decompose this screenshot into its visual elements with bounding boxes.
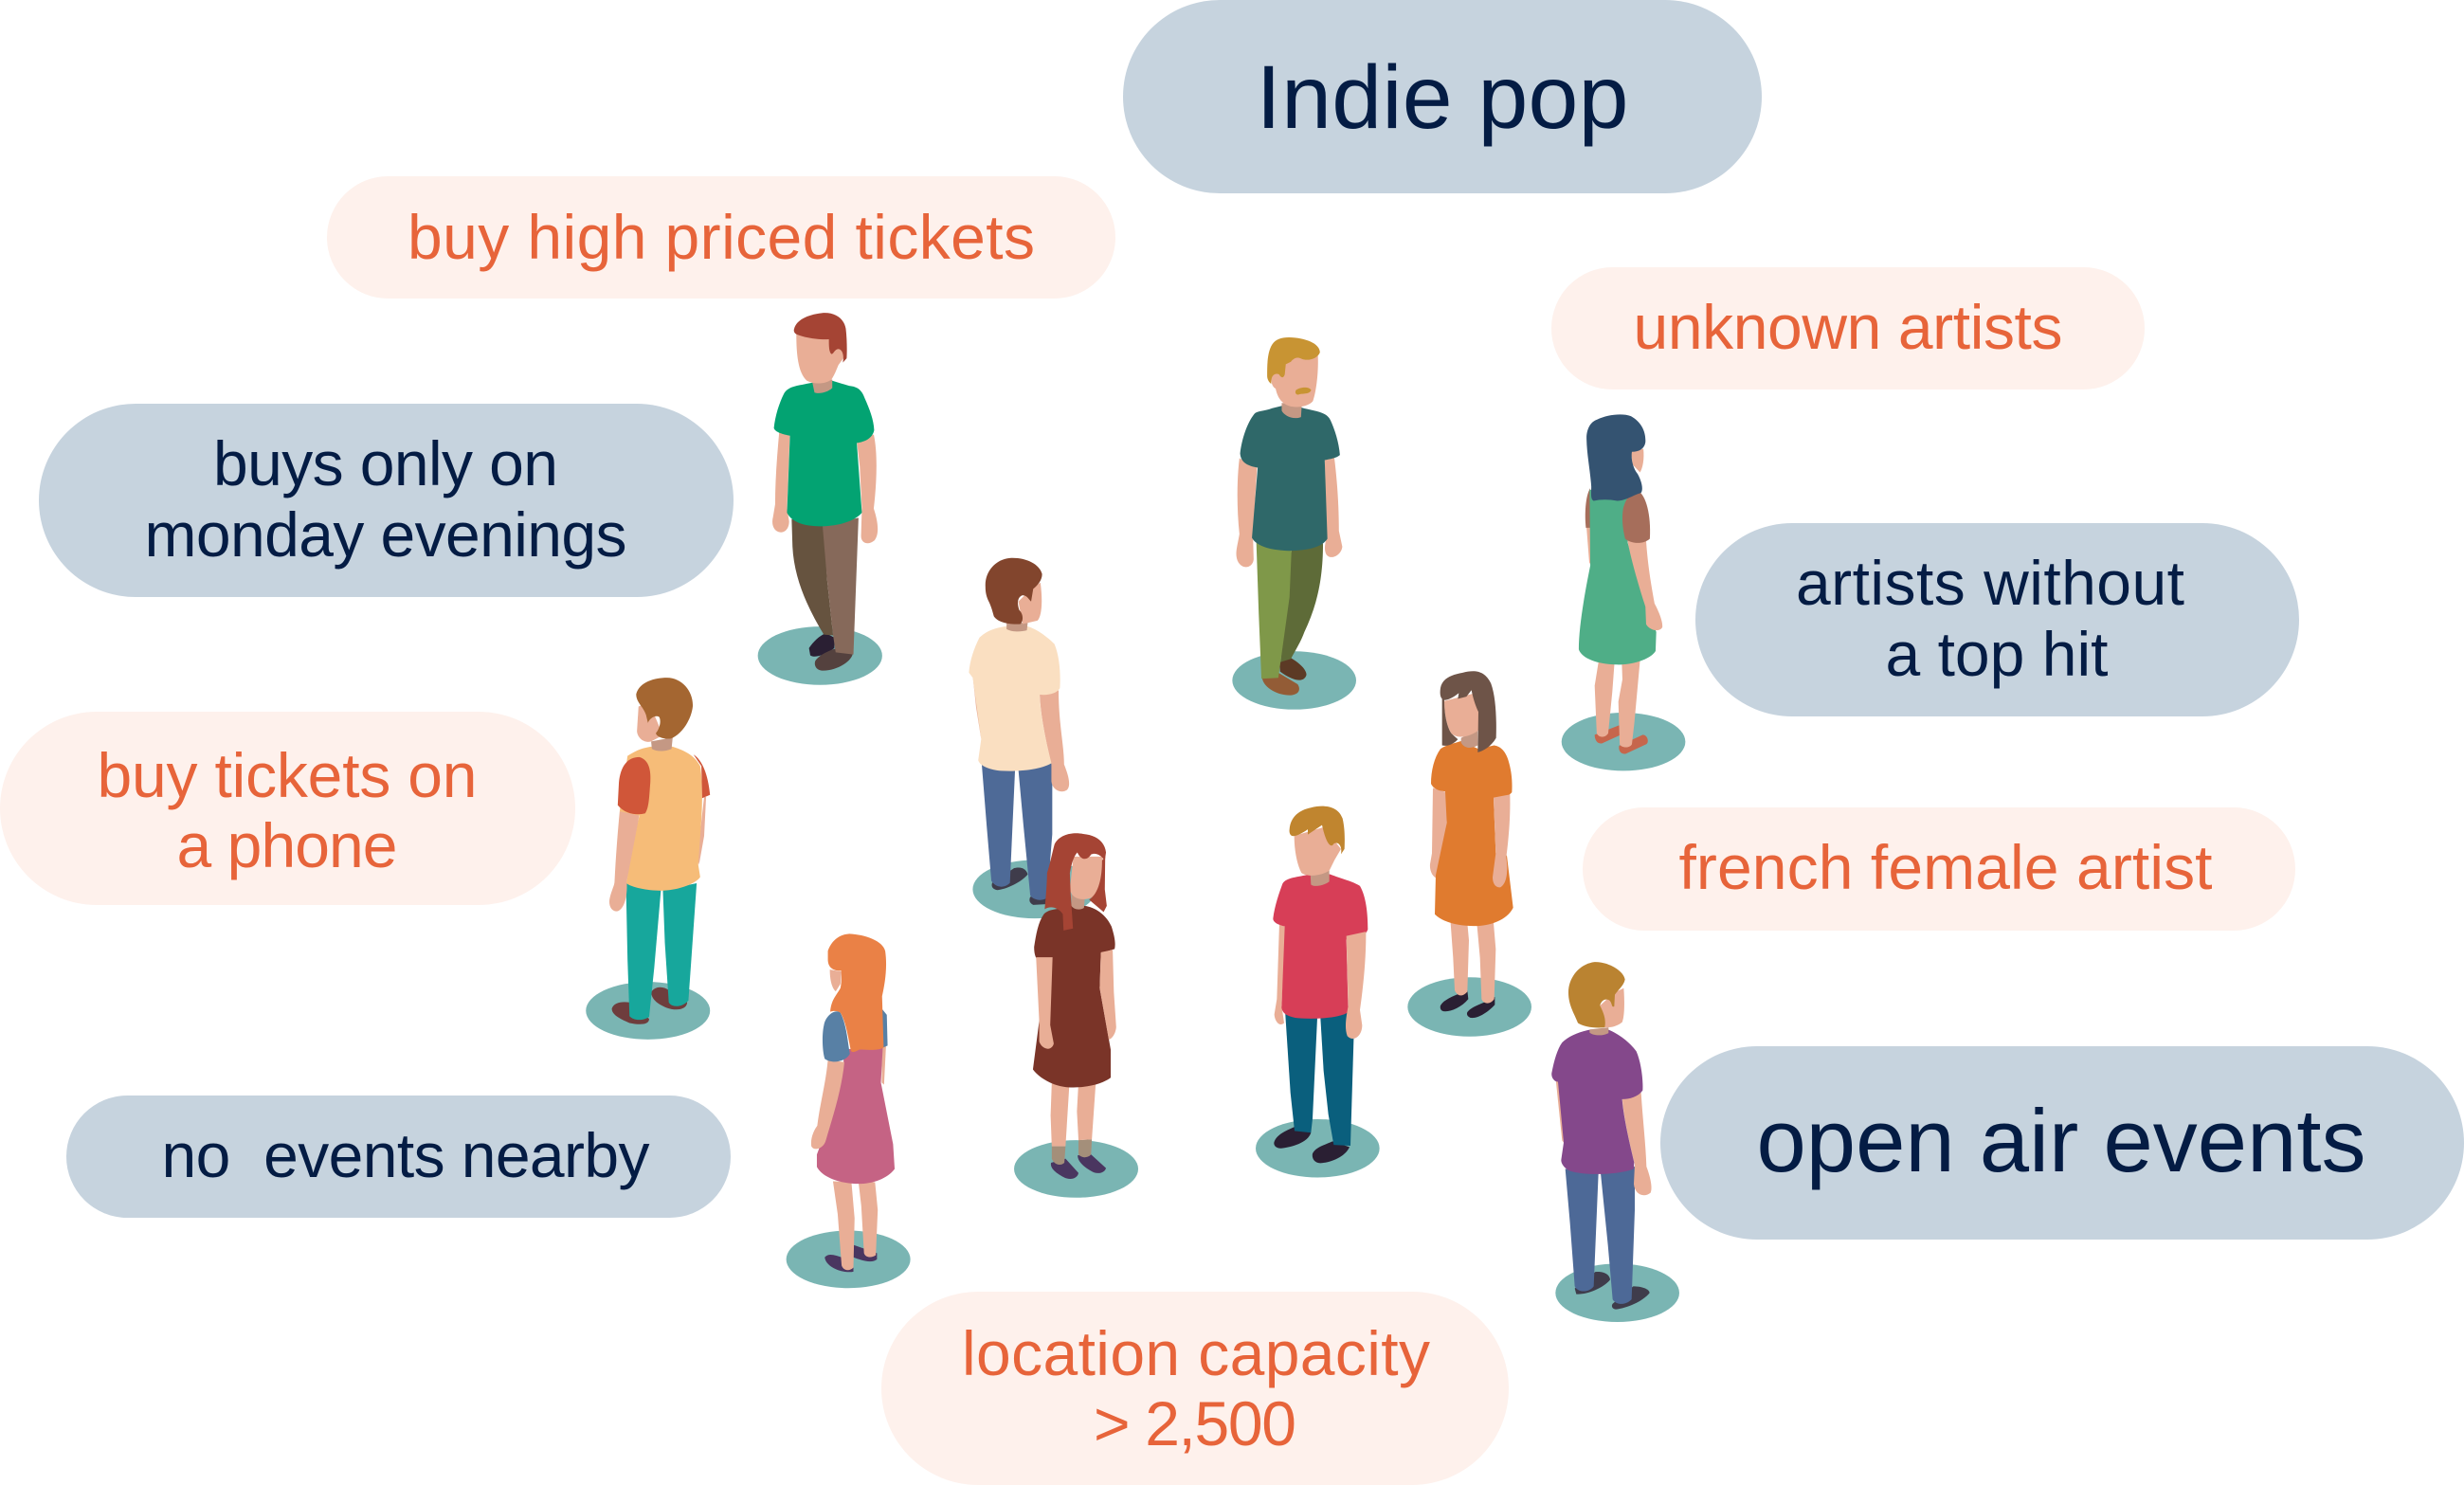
person: green shirt, red hair [758, 313, 882, 685]
pill: artists without a top hit: a top hit [1886, 619, 2108, 689]
pill: french female artist: french female artist [1679, 832, 2212, 902]
person: red shirt [1256, 806, 1380, 1178]
pill: unknown artists: unknown artists [1634, 292, 2062, 362]
pill: location capacity > 2,500: > 2,500 [1094, 1388, 1296, 1458]
pill: open air events: open air events [1757, 1091, 2365, 1190]
person: yellow shirt, teal pants [586, 678, 710, 1040]
pill: buys only on monday evenings [39, 404, 734, 597]
person: teal shirt, mustache [1232, 337, 1356, 710]
pill: buy high priced tickets: buy high priced tickets [408, 202, 1035, 272]
pill: buys only on monday evenings: buys only on [213, 428, 558, 498]
pill: french female artist [1583, 807, 2295, 931]
pill: artists without a top hit [1695, 523, 2299, 716]
person: pink dress, orange hair [787, 933, 911, 1288]
pill: location capacity > 2,500: location capacity [962, 1318, 1430, 1388]
pill: no events nearby: no events nearby [161, 1120, 650, 1190]
pill: no events nearby [66, 1096, 731, 1218]
person: green dress, blue hair [1562, 414, 1685, 770]
pill: unknown artists [1551, 267, 2145, 389]
pill: buy tickets on a phone [0, 712, 575, 905]
person: cream shirt, back view [969, 558, 1096, 918]
pill: Indie pop: Indie pop [1257, 47, 1628, 148]
person: purple shirt, back view [1551, 962, 1679, 1322]
pill: open air events [1660, 1046, 2464, 1240]
pill: artists without a top hit: artists without [1796, 548, 2184, 618]
pill: buy tickets on a phone: a phone [176, 810, 398, 880]
pill: buy high priced tickets [327, 176, 1115, 299]
pill: buy tickets on a phone: buy tickets on [97, 740, 478, 810]
pill: buys only on monday evenings: monday evenings [144, 499, 627, 570]
person: orange dress, brown hair [1407, 671, 1531, 1037]
person: brown dress, red hair [1014, 833, 1138, 1198]
pill: Indie pop [1123, 0, 1762, 193]
pill: location capacity > 2,500 [881, 1292, 1509, 1485]
